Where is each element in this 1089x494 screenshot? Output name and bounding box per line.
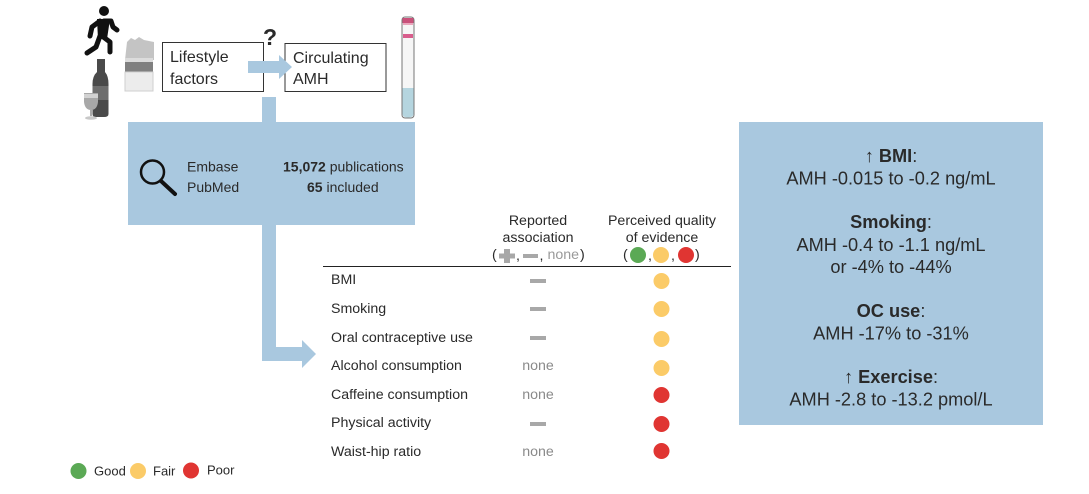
effect: exercise: AMH -2.8 to -13.2 pmol/L (789, 390, 993, 410)
table row: Caffeine consumption: none (522, 387, 554, 403)
effect: OC use: AMH -17% to -31% (813, 324, 969, 344)
effect: smoking: Smoking: (850, 212, 932, 232)
search counts (283, 158, 404, 195)
search databases: Embase (187, 158, 239, 174)
table header: perceived quality of evidence (608, 213, 717, 264)
icon: blood tube (402, 17, 414, 118)
effect: smoking (796, 212, 986, 277)
effect: smoking: or -4% to -44% (830, 257, 952, 277)
table row: Physical activity: Physical activity (331, 415, 432, 431)
table header: reported association: association (503, 230, 573, 246)
effect: BMI: ↑ BMI: (865, 146, 917, 166)
table row: Smoking (331, 301, 670, 317)
table row: Waist-hip ratio (331, 443, 670, 460)
table header: reported association (492, 213, 585, 264)
table row: Smoking: Smoking (331, 301, 386, 317)
search databases (187, 158, 239, 195)
effect: smoking: AMH -0.4 to -1.1 ng/mL (796, 235, 986, 255)
table row: Caffeine consumption (331, 387, 670, 403)
table header: perceived quality of evidence: ( (623, 247, 628, 263)
box: circulating AMH (285, 44, 386, 92)
table header: perceived quality of evidence: of evidence (626, 230, 698, 246)
icon: walking person (87, 6, 117, 53)
legend: Poor (207, 462, 235, 478)
legend (70, 462, 235, 479)
table header: reported association: Reported (509, 213, 567, 229)
table row: BMI: BMI (331, 272, 356, 288)
effect: OC use: OC use: (857, 301, 925, 321)
table header: reported association: ( (492, 247, 497, 263)
icon: magnifying glass (141, 160, 175, 194)
icon: cigarette pack (125, 37, 154, 91)
table header: perceived quality of evidence: , (671, 248, 675, 264)
box: lifestyle factors: Lifestyle (170, 49, 229, 66)
search counts: 65 included (307, 179, 379, 195)
search databases: PubMed (187, 179, 239, 195)
box: circulating AMH: AMH (293, 71, 329, 88)
arrow: search box to table (262, 225, 316, 368)
table header: perceived quality of evidence: , (648, 248, 652, 264)
effect: BMI: AMH -0.015 to -0.2 ng/mL (786, 168, 996, 188)
arrow: lifestyle to AMH (248, 55, 292, 79)
search counts: 15,072 publications (283, 158, 404, 174)
table header rule (323, 266, 731, 267)
icon: wine bottle and glass (84, 59, 108, 120)
effect: OC use (813, 301, 969, 344)
effect: BMI (786, 146, 996, 188)
table header: reported association: , (540, 248, 543, 264)
panel: effect sizes (739, 122, 1043, 425)
table row: BMI (331, 272, 670, 289)
box: lifestyle factors: factors (170, 71, 218, 88)
arrow: connector into search box (262, 97, 276, 123)
table row: Alcohol consumption: none (522, 358, 554, 374)
legend: Good (94, 464, 126, 478)
panel: literature search (128, 122, 415, 225)
table row: Oral contraceptive use (331, 330, 670, 347)
table row: Oral contraceptive use: Oral contraceptive use (331, 330, 473, 346)
table row: Alcohol consumption (331, 358, 670, 376)
table header: perceived quality of evidence: ) (695, 247, 700, 263)
effect: exercise: ↑ Exercise: (844, 367, 938, 387)
effect: exercise (789, 367, 993, 410)
table row: Waist-hip ratio: none (522, 444, 554, 460)
box: circulating AMH: Circulating (293, 50, 369, 67)
table row: Physical activity (331, 415, 670, 432)
table header: perceived quality of evidence: Perceived quality (608, 213, 717, 229)
table header: reported association: none (548, 247, 579, 263)
box: lifestyle factors (162, 42, 264, 92)
table row: Alcohol consumption: Alcohol consumption (331, 358, 462, 374)
table header: reported association: ) (580, 247, 585, 263)
legend: Fair (153, 464, 176, 478)
question mark: ? (263, 24, 277, 50)
table row: Waist-hip ratio: Waist-hip ratio (331, 444, 421, 460)
table row: Caffeine consumption: Caffeine consumption (331, 387, 468, 403)
table header: reported association: , (516, 248, 520, 264)
